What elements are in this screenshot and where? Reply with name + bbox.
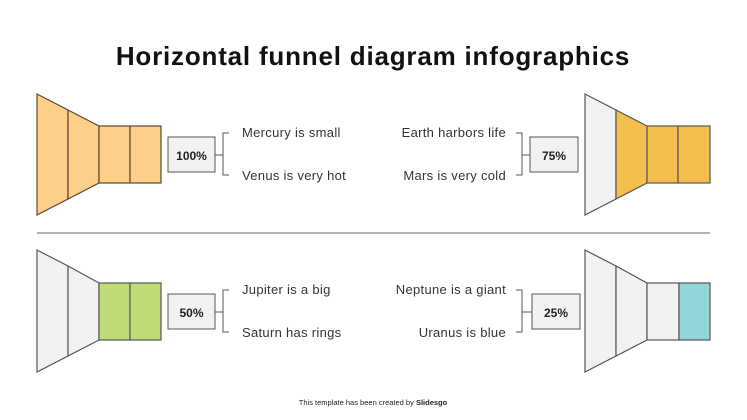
- funnel: 50%: [37, 250, 161, 372]
- bracket and labels: Earth/Mars: Mars is very cold: [403, 168, 506, 183]
- value box: 50%: 50%: [179, 306, 204, 320]
- value box: 50%: [168, 294, 215, 329]
- bracket and labels: Jupiter/Saturn: Saturn has rings: [242, 325, 342, 340]
- value box: 25%: 25%: [544, 306, 568, 320]
- funnel: 100%: [37, 94, 161, 215]
- value box: 100%: [168, 137, 215, 172]
- funnel: 75%: [585, 94, 710, 215]
- bracket and labels: Mercury/Venus: Venus is very hot: [242, 168, 346, 183]
- title: Horizontal funnel diagram infographics: [116, 41, 630, 71]
- bracket and labels: Earth/Mars: [402, 125, 530, 183]
- value box: 75%: [530, 137, 578, 172]
- funnel: 25%: [585, 250, 710, 372]
- footer: This template has been created by Slidesgo: [299, 398, 448, 407]
- bracket and labels: Mercury/Venus: Mercury is small: [242, 125, 341, 140]
- bracket and labels: Neptune/Uranus: [396, 282, 532, 340]
- value box: 75%: 75%: [542, 149, 566, 163]
- bracket and labels: Jupiter/Saturn: [215, 282, 342, 340]
- bracket and labels: Neptune/Uranus: Neptune is a giant: [396, 282, 506, 297]
- bracket and labels: Neptune/Uranus: Uranus is blue: [419, 325, 506, 340]
- bracket and labels: Mercury/Venus: [215, 125, 346, 183]
- value box: 25%: [532, 294, 580, 329]
- value box: 100%: 100%: [176, 149, 207, 163]
- bracket and labels: Earth/Mars: Earth harbors life: [402, 125, 506, 140]
- bracket and labels: Jupiter/Saturn: Jupiter is a big: [242, 282, 331, 297]
